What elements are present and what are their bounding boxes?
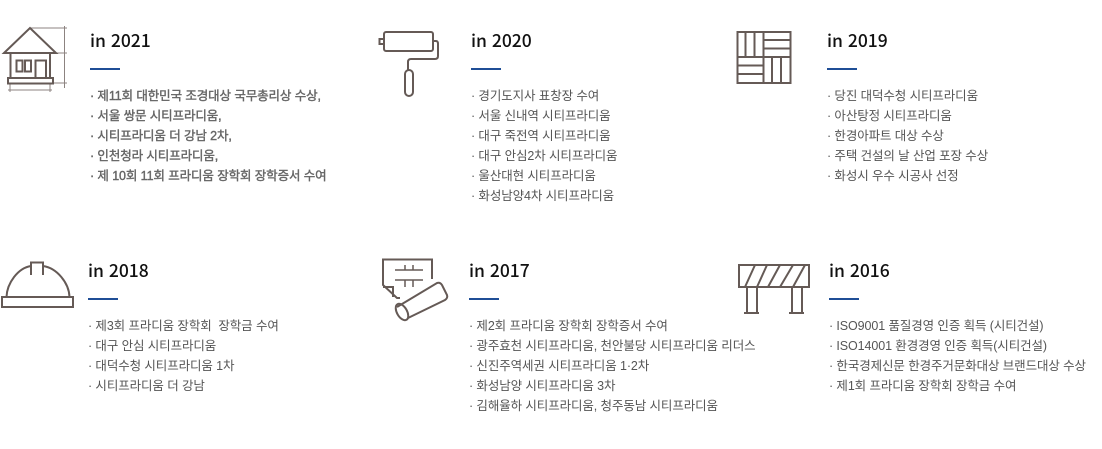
heading: in 2018: in 2018: [88, 258, 149, 283]
icon: road barrier: [738, 264, 810, 314]
list: 2017 items: · 제2회 프라디움 장학회 장학증서 수여: [469, 319, 668, 333]
list: 2020 items: · 화성남양4차 시티프라디움: [471, 189, 614, 203]
list: 2021 items: · 제 10회 11회 프라디움 장학회 장학증서 수여: [90, 169, 327, 183]
list: 2021 items: · 시티프라디움 더 강남 2차,: [90, 129, 232, 143]
heading: in 2021: in 2021: [90, 28, 151, 53]
list: 2017 items: [469, 319, 756, 413]
panel: 2016: [829, 258, 1086, 393]
list: 2016 items: [829, 319, 1086, 393]
list: 2017 items: · 광주효천 시티프라디움, 천안불당 시티프라디움 리더스: [469, 339, 756, 353]
panel: 2019: [827, 28, 988, 183]
accent bar 2020: [471, 68, 501, 70]
list: 2018 items: · 시티프라디움 더 강남: [88, 379, 205, 393]
list: 2021 items: [90, 89, 327, 183]
list: 2018 items: [88, 319, 279, 393]
list: 2019 items: · 한경아파트 대상 수상: [827, 129, 944, 143]
list: 2017 items: · 김해율하 시티프라디움, 청주동남 시티프라디움: [469, 399, 718, 413]
list: 2018 items: · 제3회 프라디움 장학회 장학금 수여: [88, 319, 279, 333]
list: 2020 items: · 서울 신내역 시티프라디움: [471, 109, 611, 123]
list: 2019 items: · 당진 대덕수청 시티프라디움: [827, 89, 978, 103]
heading: in 2019: in 2019: [827, 28, 888, 53]
icon: house: [2, 26, 67, 92]
accent bar 2018: [88, 298, 118, 300]
list: 2019 items: · 아산탕정 시티프라디움: [827, 109, 952, 123]
list: 2021 items: · 서울 쌍문 시티프라디움,: [90, 109, 222, 123]
list: 2016 items: · ISO9001 품질경영 인증 획득 (시티건설): [829, 319, 1044, 333]
list: 2020 items: · 대구 안심2차 시티프라디움: [471, 149, 617, 163]
heading: in 2017: in 2017: [469, 258, 530, 283]
accent bar 2016: [829, 298, 859, 300]
list: 2021 items: · 인천청라 시티프라디움,: [90, 149, 218, 163]
accent bar 2017: [469, 298, 499, 300]
icon: blueprint rolls: [382, 258, 448, 322]
list: 2017 items: · 신진주역세권 시티프라디움 1·2차: [469, 359, 649, 373]
panel: 2017: [469, 258, 756, 413]
list: 2018 items: · 대구 안심 시티프라디움: [88, 339, 216, 353]
list: 2020 items: · 경기도지사 표창장 수여: [471, 89, 599, 103]
panel: 2020: [471, 28, 617, 203]
list: 2018 items: · 대덕수청 시티프라디움 1차: [88, 359, 234, 373]
list: 2020 items: [471, 89, 617, 203]
list: 2019 items: · 주택 건설의 날 산업 포장 수상: [827, 149, 988, 163]
list: 2019 items: [827, 89, 988, 183]
list: 2016 items: · ISO14001 환경경영 인증 획득(시티건설): [829, 339, 1047, 353]
panel: 2018: [88, 258, 279, 393]
list: 2020 items: · 대구 죽전역 시티프라디움: [471, 129, 611, 143]
list: 2019 items: · 화성시 우수 시공사 선정: [827, 169, 959, 183]
accent bar 2021: [90, 68, 120, 70]
icon: paint roller: [378, 31, 439, 97]
panel: 2021: [90, 28, 327, 183]
list: 2016 items: · 제1회 프라디움 장학회 장학금 수여: [829, 379, 1016, 393]
accent bar 2019: [827, 68, 857, 70]
list: 2017 items: · 화성남양 시티프라디움 3차: [469, 379, 615, 393]
list: 2020 items: · 울산대현 시티프라디움: [471, 169, 596, 183]
heading: in 2016: in 2016: [829, 258, 890, 283]
heading: in 2020: in 2020: [471, 28, 532, 53]
list: 2016 items: · 한국경제신문 한경주거문화대상 브랜드대상 수상: [829, 359, 1086, 373]
list: 2021 items: · 제11회 대한민국 조경대상 국무총리상 수상,: [90, 89, 321, 103]
icon: hard hat: [1, 262, 74, 308]
icon: parquet floor: [736, 31, 792, 84]
